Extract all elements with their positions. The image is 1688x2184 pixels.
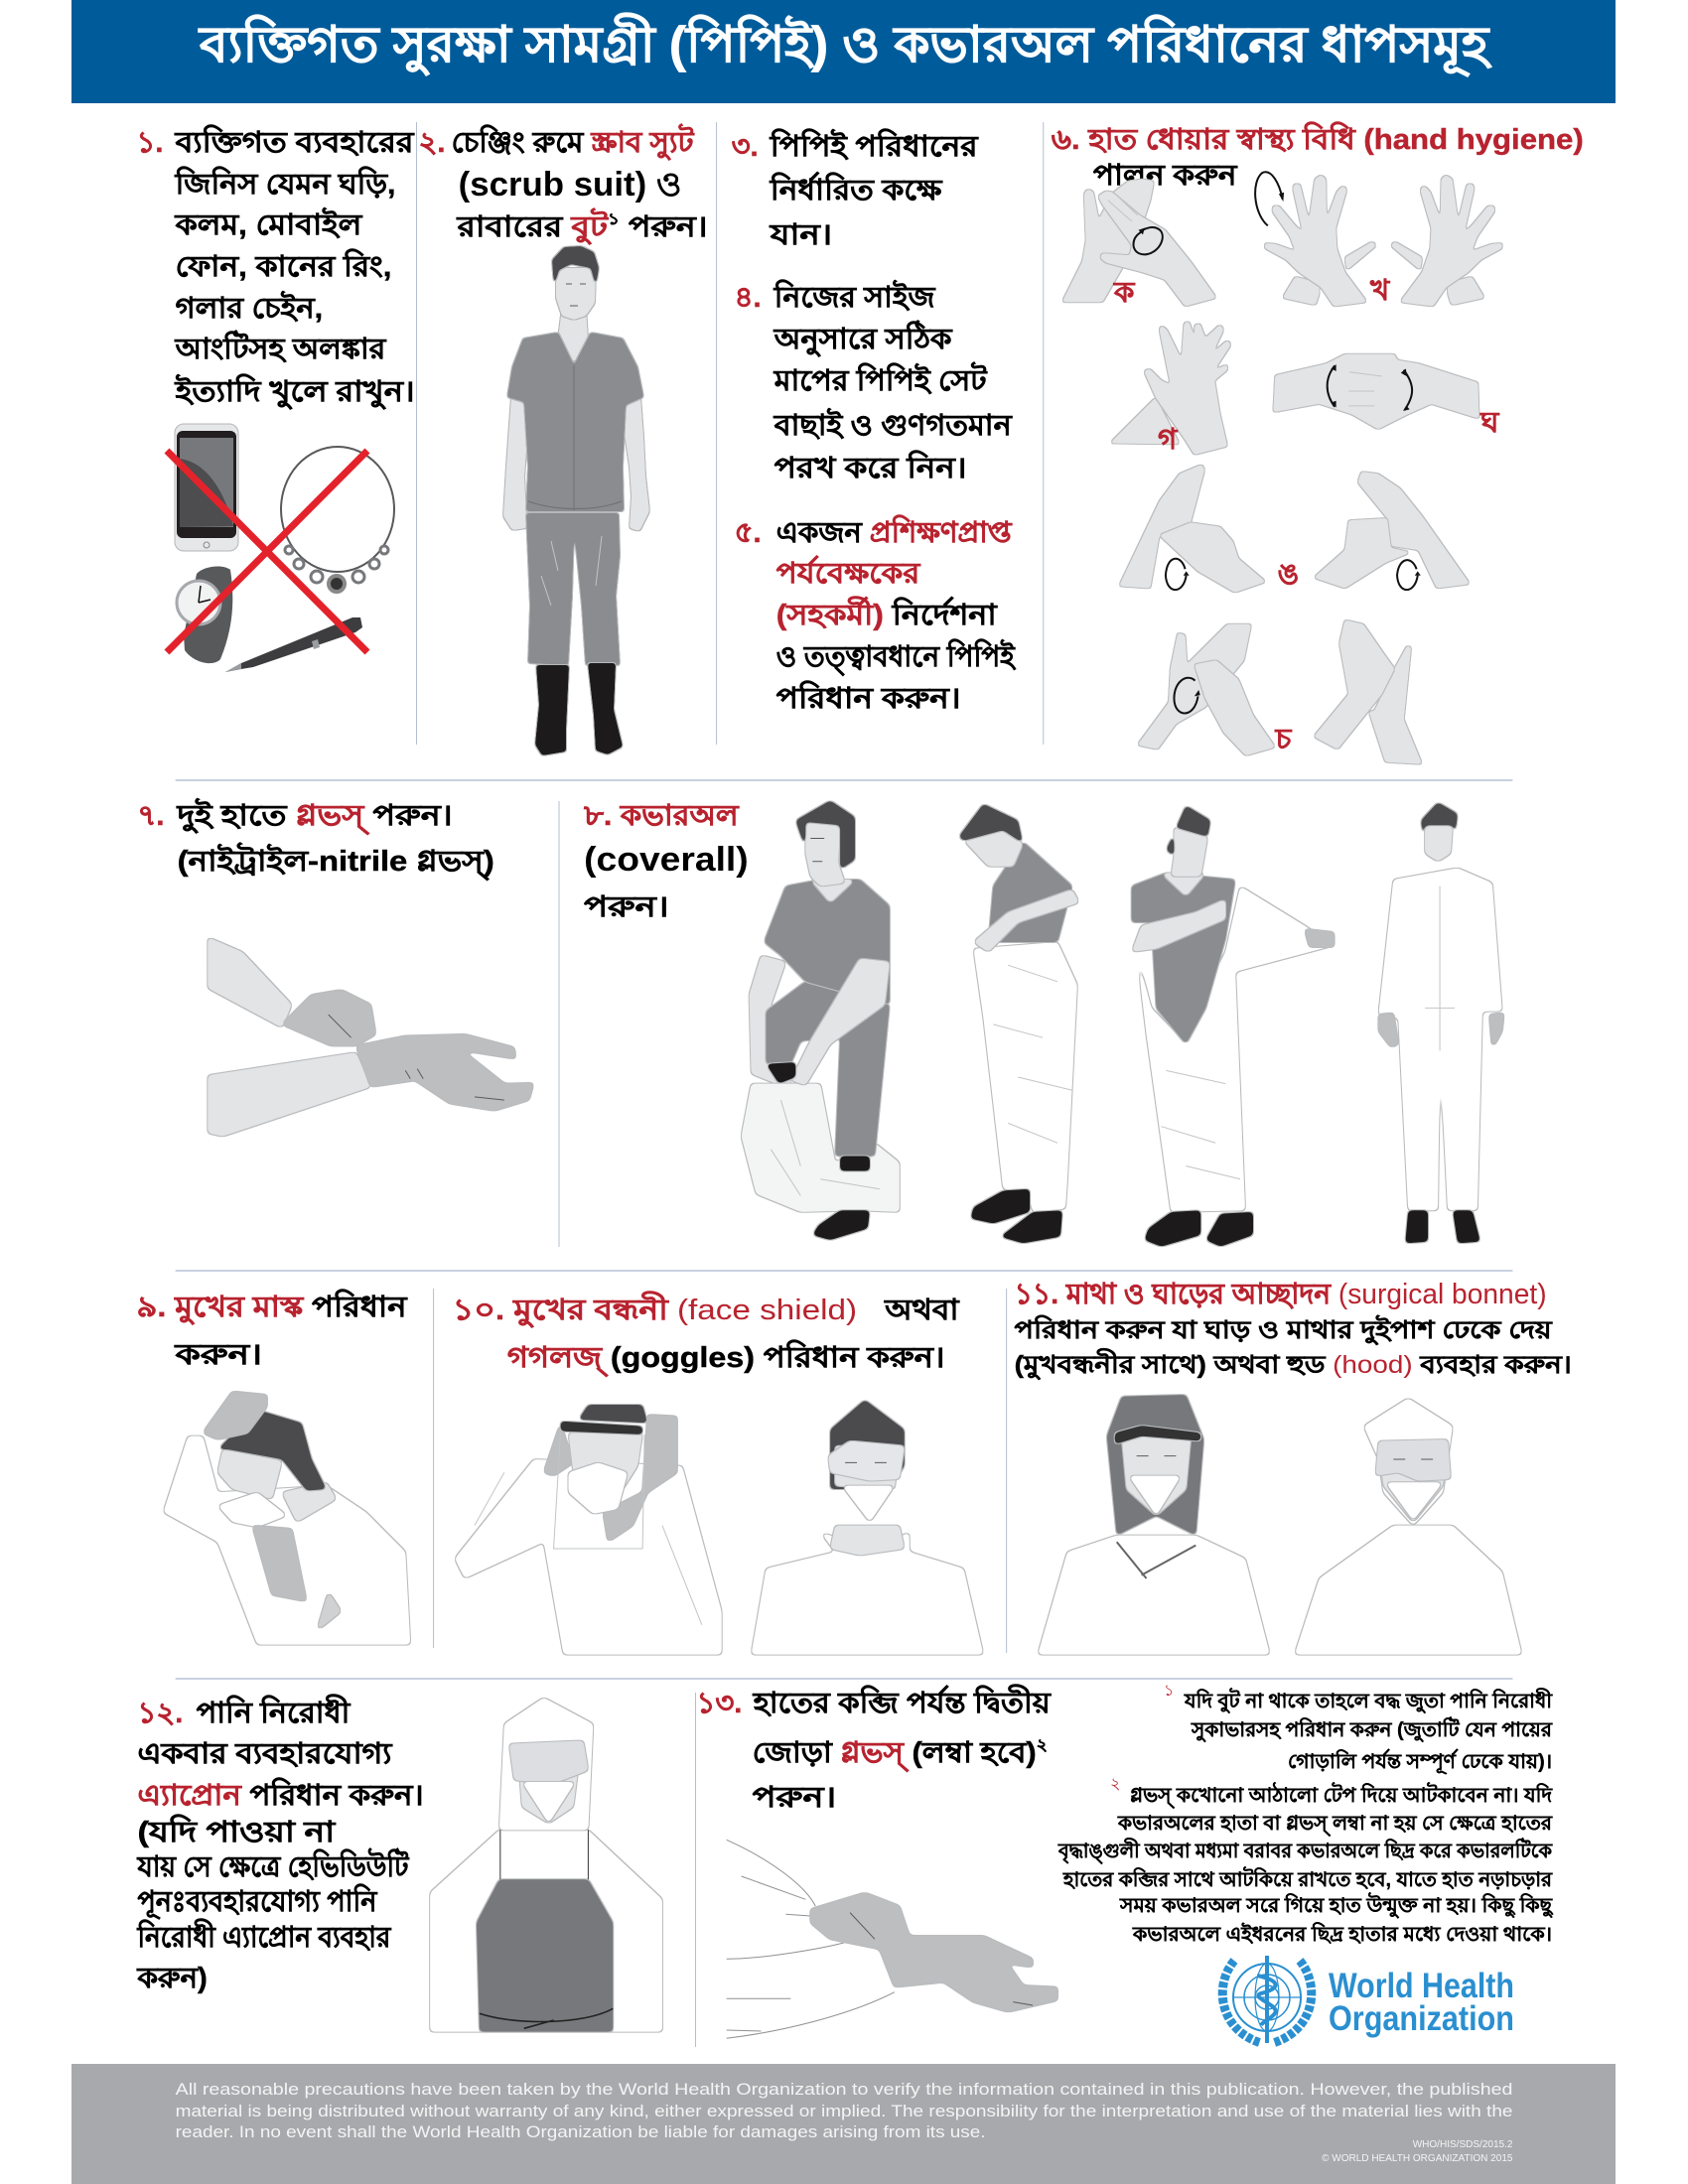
icon: WHO emblem — [1222, 1956, 1312, 2043]
panel: step 11 bonnet or hood — [1015, 1279, 1572, 1655]
step 1 text: জিনিস যেমন ঘড়ি, — [175, 166, 395, 201]
icon: watch — [177, 567, 232, 663]
illustration: figure wearing apron — [430, 1698, 662, 2032]
step 13 text: ১৩. — [697, 1688, 742, 1719]
illustration: putting on gloves — [208, 937, 534, 1137]
step 11 text — [1015, 1279, 1572, 1381]
logo: World Health Organization — [1222, 1956, 1514, 2043]
step 13 text — [697, 1684, 1052, 1814]
step 11 text: (মুখবন্ধনীর সাথে) অথবা হুড (hood) ব্যবহার করুন। — [1015, 1348, 1572, 1381]
hand step letters: চ — [1275, 724, 1293, 755]
footnotes: কভারঅলের হাতা বা গ্লভস্ লম্বা না হয় সে ক্ষেত্রে হাতের — [1117, 1813, 1553, 1837]
footer disclaimer band: © WORLD HEALTH ORGANIZATION 2015 — [1322, 2153, 1513, 2164]
step 1 text: ব্যক্তিগত ব্যবহারের — [175, 124, 415, 159]
step 10 text — [453, 1291, 960, 1377]
step 9 text: করুন। — [174, 1339, 262, 1371]
step 3 text — [732, 128, 979, 251]
hand step letters: ক — [1113, 277, 1136, 309]
step 12 text — [136, 1694, 424, 1994]
footer disclaimer band — [71, 2064, 1616, 2184]
step 12 text: (যদি পাওয়া না — [137, 1814, 337, 1848]
step 8 text — [583, 800, 749, 923]
step 6 text — [1052, 121, 1584, 192]
step 12 text: যায় সে ক্ষেত্রে হেভিডিউটি — [137, 1847, 410, 1883]
step 4 text: নিজের সাইজ — [774, 279, 935, 314]
footnotes: বৃদ্ধাঙ্গুলী অথবা মধ্যমা বরাবর কভারঅলে ছিদ্র করে কভারলটিকে — [1057, 1838, 1553, 1864]
step 10 text: গগলজ্ (goggles) পরিধান করুন। — [507, 1339, 944, 1377]
hand step letters — [1113, 275, 1499, 755]
step 7 text: দুই হাতে গ্লভস্ পরুন। — [176, 798, 453, 835]
panel: step 7 gloves — [137, 798, 534, 1137]
footnotes: হাতের কব্জির সাথে আটকিয়ে রাখতে হবে, যাতে হাত নড়াচড়ার — [1062, 1866, 1553, 1891]
step 13 text: হাতের কব্জি পর্যন্ত দ্বিতীয় — [753, 1684, 1052, 1719]
footer disclaimer band: WHO/HIS/SDS/2015.2 — [1413, 2139, 1513, 2150]
logo: World Health Organization: World Health — [1329, 1967, 1514, 2005]
step 10 text: ১০. মুখের বন্ধনী (face shield) — [453, 1291, 857, 1328]
panel: steps 3 to 5 — [732, 128, 1016, 715]
step 12 text: পানি নিরোধী — [197, 1694, 352, 1729]
step 12 text: পূনঃব্যবহারযোগ্য পানি — [137, 1883, 378, 1920]
icon: phone — [175, 424, 238, 551]
step 4 text: বাছাই ও গুণগতমান — [774, 408, 1013, 442]
footnotes: ২ — [1110, 1776, 1120, 1793]
panel: step 1 remove personal items — [136, 124, 415, 672]
illustration: second gloves over coverall — [727, 1840, 1057, 2038]
step 12 text: একবার ব্যবহারযোগ্য — [137, 1738, 393, 1770]
illustration: face shield figure — [455, 1405, 722, 1655]
step 4 text: মাপের পিপিই সেট — [774, 361, 988, 397]
footnotes: কভারঅলে এইধরনের ছিদ্র হাতার মধ্যে দেওয়া থাকে। — [1132, 1922, 1552, 1946]
illustration: four coverall figures — [742, 800, 1504, 1247]
step 6 text: পালন করুন — [1093, 160, 1238, 192]
step 10 text: অথবা — [884, 1295, 960, 1326]
step 8 text: ৮. কভারঅল — [583, 800, 740, 832]
illustration: surgical bonnet figure — [1295, 1398, 1522, 1655]
step 7 text — [137, 798, 494, 881]
illustration: putting on mask — [164, 1392, 410, 1645]
illustration: hooded figure — [1038, 1395, 1270, 1655]
illustration: hand washing steps — [1062, 172, 1502, 764]
step 1 text — [136, 124, 415, 410]
illustration: goggles figure — [752, 1400, 983, 1655]
step 12 text: ১২. — [137, 1698, 183, 1729]
step 12 text: করুন) — [136, 1963, 208, 1994]
step 9 text — [136, 1289, 408, 1371]
step 6 text: ৬. হাত ধোয়ার স্বাস্থ্য বিধি (hand hygiene) — [1052, 121, 1584, 156]
figure: person in scrubs and boots — [503, 246, 649, 755]
step 5 text — [735, 514, 1016, 715]
panel: step 8 coverall — [583, 800, 1504, 1247]
footnotes: গোড়ালি পর্যন্ত সম্পূর্ণ ঢেকে যায়)। — [1288, 1748, 1552, 1775]
step 4 text: অনুসারে সঠিক — [774, 320, 953, 357]
step 5 text: ৫. — [735, 517, 762, 549]
step 5 text: একজন প্রশিক্ষণপ্রাপ্ত — [776, 514, 1013, 549]
step 13 text: ২ — [1037, 1736, 1048, 1754]
footnotes — [1057, 1683, 1554, 1946]
step 2 text: পরুন। — [620, 211, 708, 243]
footnotes: ১ — [1164, 1683, 1174, 1700]
step 8 text: (coverall) — [584, 841, 749, 879]
title banner — [71, 0, 1616, 103]
step 3 text: পিপিই পরিধানের — [770, 128, 979, 163]
step 3 text: যান। — [770, 219, 832, 251]
step 2 text: চেঞ্জিং রুমে স্ক্রাব স্যুট — [452, 123, 695, 161]
step 9 text: ৯. মুখের মাস্ক পরিধান — [136, 1289, 408, 1325]
logo: World Health Organization: Organization — [1329, 1999, 1514, 2038]
step 13 text: পরুন। — [753, 1782, 836, 1814]
step 1 text: গলার চেইন, — [176, 291, 323, 325]
step 1 text: ইত্যাদি খুলে রাখুন। — [175, 373, 414, 410]
step 4 text: ৪. — [735, 282, 762, 314]
footer disclaimer band: reader. In no event shall the World Health Organization be liable for damages arising from its use. — [176, 2122, 986, 2141]
step 2 text: রাবারের বুট — [458, 211, 604, 243]
step 1 text: আংটিসহ অলঙ্কার — [175, 330, 386, 365]
step 12 text: নিরোধী এ্যাপ্রোন ব্যবহার — [137, 1918, 391, 1954]
step 5 text: (সহকর্মী) নির্দেশনা — [776, 596, 998, 631]
panel: step 6 hand hygiene — [1052, 121, 1584, 764]
step 11 text: ১১. মাথা ও ঘাড়ের আচ্ছাদন (surgical bonnet) — [1015, 1279, 1547, 1310]
step 4 text: পরখ করে নিন। — [774, 450, 966, 484]
step 1 text: ফোন, কানের রিং, — [176, 248, 391, 283]
footnotes: যদি বুট না থাকে তাহলে বদ্ধ জুতা পানি নিরোধী — [1184, 1688, 1553, 1714]
step 2 text: ২. — [419, 127, 446, 159]
hand step letters: খ — [1369, 275, 1390, 307]
panel: step 12 apron — [136, 1694, 662, 2032]
step 2 text — [419, 123, 708, 245]
step 1 text: ১. — [136, 127, 163, 159]
step 2 text: (scrub suit) ও — [459, 166, 681, 204]
step 3 text: নির্ধারিত কক্ষে — [770, 172, 943, 206]
hand step letters: ঙ — [1278, 559, 1299, 591]
step 7 text: ৭. — [137, 800, 165, 832]
step 8 text: পরুন। — [584, 891, 668, 923]
panel: step 10 face shield or goggles — [453, 1291, 983, 1655]
step 13 text: জোড়া গ্লভস্ (লম্বা হবে) — [753, 1737, 1029, 1769]
hand step letters: গ — [1158, 424, 1178, 456]
step 3 text: ৩. — [732, 131, 759, 163]
title banner: ব্যক্তিগত সুরক্ষা সামগ্রী (পিপিই) ও কভারঅল পরিধানের ধাপসমূহ — [198, 12, 1492, 76]
footer disclaimer band: All reasonable precautions have been taken by the World Health Organization to verify the information contained in this publication. However, the published — [176, 2080, 1512, 2099]
step 5 text: ও তত্ত্বাবধানে পিপিই — [776, 638, 1016, 676]
footnotes: গ্লভস্ কখোনো আঠালো টেপ দিয়ে আটকাবেন না। যদি — [1130, 1782, 1553, 1809]
step 4 text — [735, 279, 1013, 484]
panel: step 2 scrub suit — [419, 123, 708, 755]
icon: red cross — [167, 451, 367, 652]
footnotes: সময় কভারঅল সরে গিয়ে হাত উন্মুক্ত না হয়। কিছু কিছু — [1119, 1892, 1554, 1919]
icon: pen — [225, 617, 362, 672]
step 1 text: কলম, মোবাইল — [175, 207, 363, 241]
step 2 text: ১ — [608, 210, 620, 228]
hand step letters: ঘ — [1479, 407, 1499, 439]
step 7 text: (নাইট্রাইল-nitrile গ্লভস্) — [178, 842, 494, 881]
step 11 text: পরিধান করুন যা ঘাড় ও মাথার দুইপাশ ঢেকে দেয় — [1015, 1314, 1553, 1346]
panel: step 13 second gloves — [697, 1684, 1057, 2038]
icon: necklace — [281, 447, 394, 592]
footnotes: সুকাভারসহ পরিধান করুন (জুতাটি যেন পায়ের — [1191, 1716, 1553, 1743]
step 5 text: পরিধান করুন। — [776, 680, 960, 715]
panel: step 9 face mask — [136, 1289, 410, 1645]
footer disclaimer band: material is being distributed without warranty of any kind, either expressed or implied. The responsibility for the interpretation and use of the material lies with the — [176, 2102, 1512, 2120]
step 12 text: এ্যাপ্রোন পরিধান করুন। — [137, 1777, 424, 1812]
step 5 text: পর্যবেক্ষকের — [776, 555, 920, 590]
